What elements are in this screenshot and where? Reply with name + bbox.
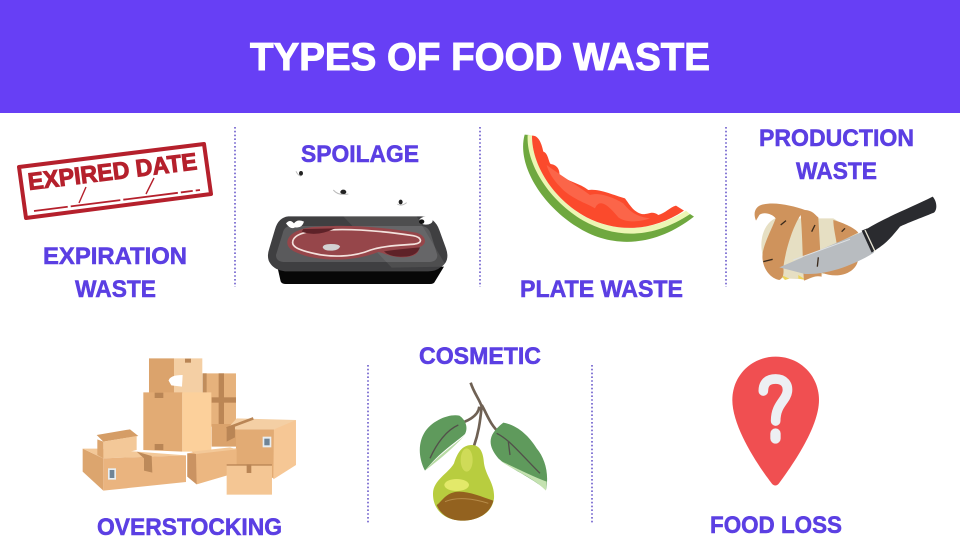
panel: food loss (710, 357, 842, 539)
label: plate waste: PLATE WASTE (520, 276, 683, 303)
panel: expiration waste (19, 144, 211, 303)
icon: blemished pear with leaves (420, 383, 547, 521)
panel: plate waste (520, 135, 694, 303)
icon: pile of cardboard boxes (83, 358, 296, 495)
label: cosmetic: COSMETIC (419, 343, 541, 370)
icon: map pin with question mark (732, 357, 819, 485)
label: food loss: FOOD LOSS (710, 512, 842, 539)
label: production waste (759, 125, 914, 185)
label: expiration waste (43, 243, 187, 303)
icon: spoiled meat tray with flies (268, 171, 447, 284)
label: expiration waste: WASTE (75, 276, 156, 303)
icon: expired date stamp (19, 144, 211, 218)
label: expiration waste: EXPIRATION (43, 243, 187, 270)
header banner: TYPES OF FOOD WASTE (250, 36, 710, 79)
icon: peeled potato and knife (755, 197, 936, 281)
label: production waste: WASTE (796, 158, 877, 185)
header banner (0, 0, 960, 113)
label: production waste: PRODUCTION (759, 125, 914, 152)
panel: cosmetic (419, 343, 547, 521)
panel: overstocking (83, 358, 296, 540)
panel: production waste (755, 125, 936, 281)
icon: expired date stamp: EXPIRED DATE (26, 148, 198, 196)
icon: eaten watermelon rind (523, 135, 694, 242)
panel: spoilage (268, 141, 447, 284)
label: spoilage: SPOILAGE (301, 141, 419, 168)
